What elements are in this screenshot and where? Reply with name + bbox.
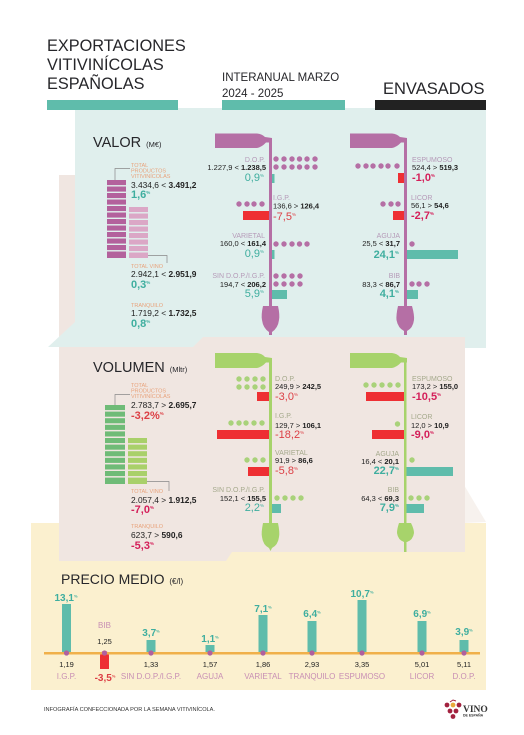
price values: 1,33 bbox=[144, 660, 158, 669]
item: espumoso valor: 524,4 > 519,3 bbox=[412, 163, 458, 172]
item: aguja volumen: 16,4 < 20,1 bbox=[361, 457, 399, 466]
item: varietal valor: 160,0 < 161,4 bbox=[220, 239, 267, 248]
logo: vino de españa: DE ESPAÑA bbox=[463, 712, 484, 718]
price values: 1,57 bbox=[203, 660, 217, 669]
logo: vino de españa bbox=[445, 700, 488, 719]
category labels: BIB bbox=[98, 621, 111, 630]
item: sin D.O.P. volumen: % bbox=[260, 503, 264, 508]
item: I.G.P. volumen: % bbox=[300, 430, 304, 435]
item: licor valor: -2,7 bbox=[411, 210, 430, 222]
logo: vino de españa: VINO bbox=[463, 705, 488, 715]
text: total productos volumen: -3,2% bbox=[131, 410, 160, 422]
text: tranquilo volumen: % bbox=[150, 541, 154, 546]
item: D.O.P. valor: D.O.P. bbox=[245, 157, 265, 164]
text: total vino valor: 0,3 bbox=[131, 279, 146, 291]
item: licor valor: LICOR bbox=[411, 195, 432, 202]
text: total vino volumen bbox=[131, 489, 197, 516]
item: aguja valor: 24,1 bbox=[374, 249, 395, 261]
item: licor volumen: 12,0 > 10,9 bbox=[411, 421, 449, 430]
item: varietal volumen bbox=[244, 450, 313, 477]
category labels: LICOR bbox=[410, 672, 434, 681]
item: D.O.P. volumen bbox=[236, 376, 321, 403]
text: total productos volumen: % bbox=[160, 411, 164, 416]
icon: bottle and glass valor left bbox=[215, 134, 279, 335]
price values: 2,93 bbox=[305, 660, 319, 669]
percent labels bbox=[54, 589, 473, 684]
text: tranquilo volumen bbox=[131, 524, 183, 552]
item: BIB valor: 83,3 < 86,7 bbox=[362, 280, 400, 289]
percent labels: % bbox=[469, 628, 473, 632]
text: total vino valor: % bbox=[146, 280, 150, 285]
item: BIB volumen: 64,3 < 69,3 bbox=[361, 494, 399, 503]
price values: 3,35 bbox=[355, 660, 369, 669]
text: total productos volumen: TOTAL bbox=[131, 383, 148, 389]
footer credit: INFOGRAFÍA CONFECCIONADA POR LA SEMANA VITIVINÍCOLA. bbox=[44, 706, 215, 713]
item: sin D.O.P. valor bbox=[212, 273, 303, 300]
item: I.G.P. valor: 136,6 > 126,4 bbox=[273, 202, 320, 210]
text: tranquilo volumen: -5,3 bbox=[131, 540, 150, 552]
title: VITIVINÍCOLAS bbox=[47, 55, 164, 74]
text: total productos valor: 3.434,6 < 3.491,2 bbox=[131, 180, 197, 190]
title bbox=[47, 37, 186, 93]
text: total vino volumen: % bbox=[150, 505, 154, 510]
header bars bbox=[47, 100, 486, 110]
icon: bottle and glass volumen right bbox=[350, 353, 414, 552]
subtitle: period bbox=[222, 72, 339, 100]
heading: valor: VALOR (M€) bbox=[93, 135, 162, 151]
item: espumoso valor: ESPUMOSO bbox=[412, 157, 453, 164]
percent labels: % bbox=[156, 628, 160, 634]
heading: precio medio: PRECIO MEDIO (€/l) bbox=[61, 571, 183, 587]
panel: precio medio bbox=[44, 571, 480, 684]
text: total productos volumen: VITIVINÍCOLAS bbox=[131, 393, 171, 400]
stacked chart: valor totals bbox=[107, 168, 167, 263]
background: price panel bbox=[31, 523, 486, 690]
item: BIB volumen: 7,9 bbox=[380, 502, 395, 514]
percent labels: 3,9 bbox=[455, 627, 469, 638]
item: varietal volumen: -5,8 bbox=[275, 465, 294, 477]
text: total productos valor: 1,6 bbox=[131, 189, 146, 201]
item: licor volumen: % bbox=[430, 430, 434, 435]
text: tranquilo volumen: TRANQUILO bbox=[131, 524, 164, 530]
item: varietal volumen: VARIETAL bbox=[275, 450, 308, 457]
percent labels: 1,1 bbox=[201, 634, 215, 645]
item: I.G.P. valor: -7,5 bbox=[273, 211, 292, 223]
item: D.O.P. valor: 1.227,9 < 1.238,5 bbox=[207, 163, 266, 172]
item: espumoso volumen bbox=[363, 376, 458, 403]
text: total productos volumen: 2.783,7 > 2.695,7 bbox=[131, 400, 197, 410]
text: total vino valor: 2.942,1 < 2.951,9 bbox=[131, 269, 197, 279]
item: aguja valor bbox=[362, 233, 458, 261]
percent labels: 13,1 bbox=[54, 593, 74, 604]
item: sin D.O.P. volumen bbox=[212, 487, 304, 514]
item: I.G.P. volumen bbox=[217, 413, 321, 441]
item: BIB volumen bbox=[361, 487, 430, 514]
item: varietal valor: % bbox=[260, 249, 264, 254]
percent labels: 7,1 bbox=[254, 604, 268, 615]
text: total productos valor: % bbox=[146, 190, 150, 195]
text: total productos valor: TOTAL bbox=[131, 163, 148, 169]
title: ESPAÑOLAS bbox=[47, 73, 145, 93]
price values: 5,11 bbox=[457, 660, 471, 669]
panel: volumen bbox=[93, 353, 458, 552]
text: total productos valor bbox=[131, 163, 197, 201]
item: BIB volumen: % bbox=[395, 503, 399, 508]
item: aguja volumen: 22,7 bbox=[374, 465, 395, 477]
item: licor valor bbox=[380, 195, 449, 222]
item: D.O.P. volumen: % bbox=[294, 392, 298, 397]
item: espumoso valor: % bbox=[431, 173, 435, 178]
text: total vino valor bbox=[131, 264, 197, 291]
item: sin D.O.P. valor: % bbox=[260, 289, 264, 294]
percent labels: -3,5 bbox=[95, 673, 112, 684]
item: aguja valor: 25,5 < 31,7 bbox=[362, 239, 400, 248]
item: licor valor: % bbox=[430, 211, 434, 216]
item: sin D.O.P. volumen: 152,1 < 155,5 bbox=[220, 494, 266, 503]
item: D.O.P. volumen: D.O.P. bbox=[275, 376, 295, 383]
percent labels: 10,7 bbox=[350, 589, 370, 600]
text: tranquilo valor bbox=[131, 303, 197, 330]
category labels: VARIETAL bbox=[244, 672, 282, 681]
item: BIB volumen: BIB bbox=[388, 487, 399, 494]
percent labels: % bbox=[268, 604, 272, 610]
stacked chart: volumen totals bbox=[105, 394, 169, 491]
item: varietal valor: VARIETAL bbox=[232, 233, 265, 240]
price values: 1,86 bbox=[256, 660, 270, 669]
item: BIB valor: BIB bbox=[389, 273, 400, 280]
percent labels: 6,4 bbox=[303, 609, 317, 620]
item: sin D.O.P. valor: SIN D.O.P./I.G.P. bbox=[212, 273, 265, 280]
text: total vino volumen: 2.057,4 > 1.912,5 bbox=[131, 495, 197, 505]
item: I.G.P. volumen: -18,2 bbox=[275, 429, 300, 441]
text: total productos valor: VITIVINÍCOLAS bbox=[131, 173, 171, 180]
item: I.G.P. valor bbox=[236, 195, 320, 223]
item: espumoso volumen: -10,5 bbox=[412, 391, 437, 403]
price values: 1,25 bbox=[97, 637, 112, 646]
item: I.G.P. volumen: I.G.P. bbox=[275, 413, 292, 420]
text: total vino valor: TOTAL VINO bbox=[131, 264, 164, 270]
item: sin D.O.P. valor: 5,9 bbox=[245, 288, 260, 300]
item: aguja valor: % bbox=[395, 250, 399, 255]
item: varietal volumen: 91,9 > 86,6 bbox=[275, 456, 313, 465]
item: espumoso volumen: % bbox=[437, 392, 441, 397]
item: sin D.O.P. volumen: 2,2 bbox=[245, 502, 260, 514]
item: espumoso volumen: ESPUMOSO bbox=[412, 376, 453, 383]
item: I.G.P. valor: I.G.P. bbox=[273, 195, 290, 202]
category labels bbox=[57, 621, 475, 681]
item: BIB valor bbox=[362, 273, 430, 300]
item: BIB valor: % bbox=[395, 289, 399, 294]
heading: volumen: VOLUMEN (Mltr) bbox=[93, 360, 188, 376]
item: sin D.O.P. volumen: SIN D.O.P./I.G.P. bbox=[212, 487, 265, 494]
price values: 5,01 bbox=[415, 660, 429, 669]
text: tranquilo valor: % bbox=[146, 319, 150, 324]
item: aguja volumen: % bbox=[395, 466, 399, 471]
item: I.G.P. valor: % bbox=[292, 212, 296, 217]
item: varietal valor bbox=[220, 233, 310, 260]
text: total productos volumen: PRODUCTOS bbox=[131, 388, 166, 394]
text: total productos valor: PRODUCTOS bbox=[131, 168, 166, 174]
item: licor valor: 56,1 > 54,6 bbox=[411, 201, 449, 210]
subtitle: period: 2024 - 2025 bbox=[222, 88, 283, 100]
item: varietal valor: 0,9 bbox=[245, 248, 260, 260]
price values bbox=[59, 637, 471, 669]
title: EXPORTACIONES bbox=[47, 37, 186, 55]
percent labels: % bbox=[317, 610, 321, 614]
percent labels: % bbox=[427, 610, 431, 614]
item: aguja volumen bbox=[361, 451, 453, 477]
item: BIB valor: 4,1 bbox=[380, 288, 395, 300]
item: D.O.P. valor bbox=[207, 156, 318, 184]
percent labels: 3,7 bbox=[142, 628, 156, 639]
subtitle: period: INTERANUAL MARZO bbox=[222, 72, 339, 84]
item: sin D.O.P. valor: 194,7 < 206,2 bbox=[220, 280, 266, 289]
text: total productos volumen bbox=[131, 383, 197, 422]
text: tranquilo valor: 0,8 bbox=[131, 318, 146, 330]
item: aguja valor: AGUJA bbox=[377, 233, 400, 240]
background: volume panel bbox=[59, 175, 465, 561]
background: value panel bbox=[48, 108, 486, 348]
category labels: I.G.P. bbox=[57, 672, 76, 681]
percent labels: 6,9 bbox=[413, 609, 427, 620]
percent labels: % bbox=[215, 634, 219, 640]
percent labels: % bbox=[112, 674, 116, 678]
price values: 1,19 bbox=[59, 660, 74, 669]
item: espumoso valor bbox=[355, 157, 458, 184]
item: espumoso volumen: 173,2 > 155,0 bbox=[412, 382, 458, 391]
category labels: AGUJA bbox=[197, 672, 224, 681]
category labels: SIN D.O.P./I.G.P. bbox=[121, 672, 181, 681]
panel: valor bbox=[93, 134, 458, 335]
text: total vino volumen: TOTAL VINO bbox=[131, 489, 164, 495]
icon: bottle and glass valor right bbox=[350, 134, 414, 335]
item: licor volumen: -9,0 bbox=[411, 429, 430, 441]
category labels: TRANQUILO bbox=[289, 672, 335, 681]
item: licor volumen bbox=[372, 414, 449, 441]
background: volume corner bbox=[464, 485, 486, 523]
category labels: ESPUMOSO bbox=[339, 672, 385, 681]
percent labels: % bbox=[74, 594, 78, 598]
text: total vino volumen: -7,0 bbox=[131, 504, 150, 516]
text: tranquilo valor: TRANQUILO bbox=[131, 303, 164, 309]
item: espumoso valor: -1,0 bbox=[412, 172, 431, 184]
category labels: D.O.P. bbox=[453, 672, 475, 681]
heading: envasados: ENVASADOS bbox=[383, 80, 484, 98]
item: D.O.P. volumen: -3,0 bbox=[275, 391, 294, 403]
item: D.O.P. volumen: 249,9 > 242,5 bbox=[275, 382, 321, 391]
bar chart: price changes bbox=[44, 600, 480, 669]
percent labels: % bbox=[370, 590, 374, 594]
item: D.O.P. valor: % bbox=[260, 173, 264, 178]
text: tranquilo valor: 1.719,2 < 1.732,5 bbox=[131, 308, 197, 318]
icon: bottle and glass volumen left bbox=[215, 353, 279, 551]
text: tranquilo volumen: 623,7 > 590,6 bbox=[131, 530, 183, 540]
item: varietal volumen: % bbox=[294, 466, 298, 471]
item: aguja volumen: AGUJA bbox=[376, 451, 399, 458]
item: licor volumen: LICOR bbox=[411, 414, 432, 421]
item: I.G.P. volumen: 129,7 > 106,1 bbox=[275, 421, 321, 430]
item: D.O.P. valor: 0,9 bbox=[245, 172, 260, 184]
